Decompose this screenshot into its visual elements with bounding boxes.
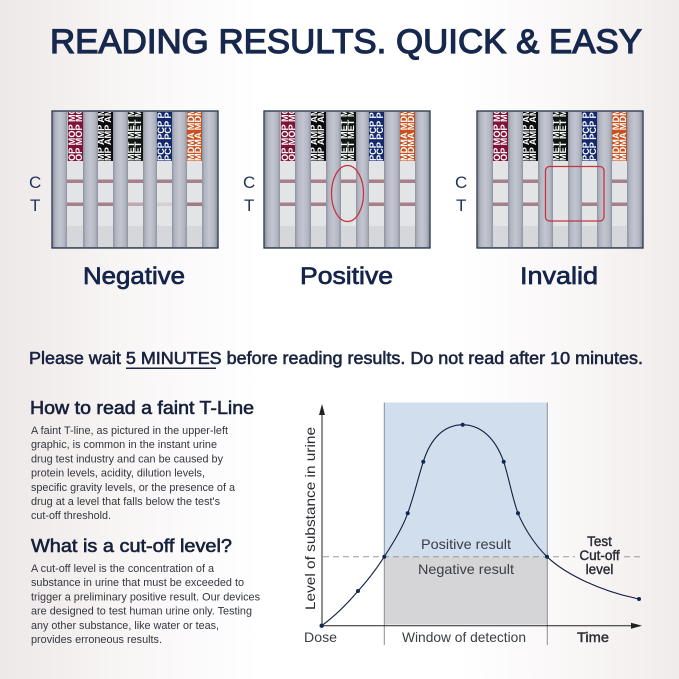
test cassette photo: negative: MDMA MDM [186,108,196,161]
text block: what is a cut-off level [31,535,260,646]
test cassette photo: positive: MET MET M [346,109,356,161]
test cassette photo: negative: MDMA MDM [193,108,203,161]
body copy: cut-off level: trigger a preliminary positive result. Our devices [31,591,260,603]
chart: level of substance over time [303,402,642,645]
test cassette photo: positive: PCP PCP P [368,112,378,161]
test cassette photo: invalid: MP AMP AMP [521,102,531,161]
test cassette photo: positive: OP MOP MOP [280,101,290,161]
body copy: faint T-line: A faint T-line, as pictured in the upper-left [31,425,228,437]
body copy: cut-off level: substance in urine that must be exceeded to [31,577,244,589]
x axis labels: Window of detection [402,630,526,645]
window of detection: positive zone [384,402,547,556]
test cassette photo: positive: OP MOP MOP [287,101,297,161]
heading: what is a cut-off level: What is a cut-off level? [31,535,232,556]
C and T labels [243,173,255,215]
body copy: faint T-line: drug test industry and can be caused by [31,453,224,465]
C and T labels [29,173,41,215]
panel: positive result [243,101,430,290]
heading: how to read a faint T-line: How to read a faint T-Line [30,397,254,418]
zone label: negative result: Negative result [418,562,514,577]
test cassette photo: invalid: MDMA MDM [618,108,628,161]
C and T labels [455,173,467,215]
body copy: cut-off level: A cut-off level is the concentration of a [31,563,214,575]
body copy: faint T-line: drug at a level that falls below the test's [31,496,220,508]
test cassette photo: invalid: PCP PCP P [588,112,598,161]
label: Positive: Positive [300,263,393,290]
C and T labels: C [243,173,255,192]
test cassette photo: negative: PCP PCP P [156,112,166,161]
test cassette photo: positive: PCP PCP P [375,112,385,161]
body copy: faint T-line: protein levels, acidity, dilution levels, [31,468,205,480]
wait-time instruction: Please wait 5 MINUTES before reading results. Do not read after 10 minutes. [29,348,643,368]
test cassette photo: invalid: OP MOP MOP [499,101,509,161]
text block: how to read a faint T-line [30,397,254,522]
test cassette photo: positive [264,101,430,248]
zone label: positive result: Positive result [421,537,511,552]
body copy: cut-off level: provides erroneous results. [31,634,162,646]
label: Invalid: Invalid [520,263,598,290]
x axis labels: Dose [304,630,337,645]
title: READING RESULTS. QUICK & EASY [50,23,642,61]
body copy: faint T-line [31,425,235,522]
test cassette photo: positive: MDMA MDM [406,108,416,161]
curve data points [320,423,641,628]
test cassette photo: invalid: OP MOP MOP [492,101,502,161]
test cassette photo: positive: MP AMP AMP [309,102,319,161]
test cassette photo: negative: OP MOP MOP [74,101,84,161]
test cassette photo: invalid: PCP PCP P [581,112,591,161]
C and T labels: C [29,173,41,192]
body copy: cut-off level: are designed to test human urine only. Testing [31,606,252,618]
test cassette photo: invalid: MET MET M [558,109,568,161]
body copy: cut-off level [31,563,260,646]
C and T labels: C [455,173,467,192]
cut-off label: Test [587,534,612,549]
panel: invalid result [455,101,643,290]
test cassette photo: negative: OP MOP MOP [67,101,77,161]
panel: negative result [29,101,218,290]
C and T labels: T [456,196,466,215]
body copy: faint T-line: graphic, is common in the instant urine [31,439,217,451]
test cassette photo: invalid: MP AMP AMP [528,102,538,161]
window of detection: negative zone [384,556,547,624]
red ellipse highlighting missing T line [332,166,364,222]
test cassette photo: positive: MDMA MDM [399,108,409,161]
test cassette photo: invalid: MDMA MDM [611,108,621,161]
test cassette photo: negative: MET MET M [126,109,136,161]
test cassette photo: invalid [477,101,643,248]
test cassette photo: positive: MET MET M [339,109,349,161]
axes [319,404,642,629]
body copy: cut-off level: any other substance, like water or teas, [31,620,219,632]
label: Negative: Negative [83,263,185,290]
test cassette photo: invalid: MET MET M [551,109,561,161]
cut-off label: level [586,562,613,577]
cut-off dashed line [323,556,640,558]
test cassette photo: negative: MET MET M [133,109,143,161]
cut-off label [579,534,620,577]
test cassette photo: negative: MP AMP AMP [103,102,113,161]
cut-off label: Cut-off [579,548,620,563]
excretion curve [322,425,639,626]
test cassette photo: negative [52,101,218,248]
test cassette photo: positive: MP AMP AMP [316,102,326,161]
C and T labels: T [244,196,254,215]
x axis labels: Time [577,630,609,645]
red rectangle highlighting missing C lines [546,166,604,221]
x axis labels [304,630,609,645]
window boundaries [384,402,547,645]
test cassette photo: negative: MP AMP AMP [96,102,106,161]
body copy: faint T-line: specific gravity levels, or the presence of a [31,482,235,494]
C and T labels: T [30,196,40,215]
body copy: faint T-line: cut-off threshold. [31,510,111,522]
y axis label: Level of substance in urine [303,427,318,610]
test cassette photo: negative: PCP PCP P [163,112,173,161]
